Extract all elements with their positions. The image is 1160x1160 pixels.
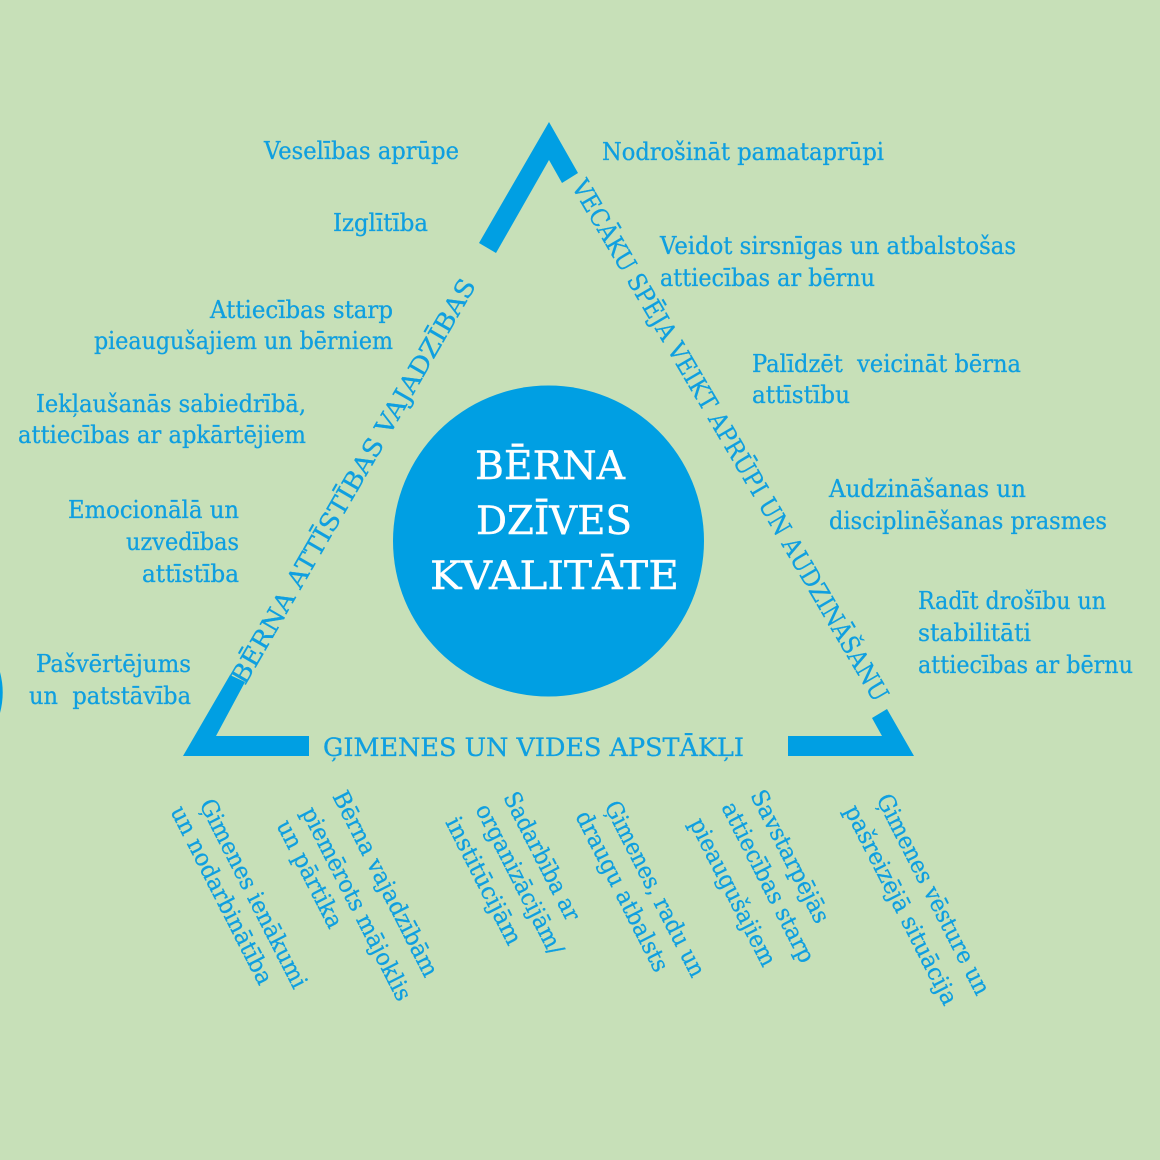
bottom item: family and friends support: Ģimenes, radu un [599, 796, 712, 982]
right list: parenting capacity: attīstību [752, 381, 850, 409]
bottom item: relations between adults: Savstarpējās [745, 785, 836, 928]
right list: parenting capacity: attiecības ar bērnu [918, 651, 1133, 679]
left list: child development needs [18, 137, 459, 710]
heading: bottom side of triangle: ĢIMENES UN VIDES APSTĀKĻI [323, 733, 744, 762]
right list: parenting capacity: attiecības ar bērnu [660, 264, 875, 292]
bottom item: housing and food: piemērots mājoklis [296, 802, 418, 1005]
bottom item: income and employment: un nodarbinātība [165, 801, 279, 989]
left list: child development needs: Pašvērtējums [36, 650, 191, 678]
bottom item: family history and current situation: pašreizējā situācija [839, 800, 964, 1010]
left list: child development needs: Attiecības starp [209, 296, 393, 324]
bottom item: housing and food [271, 786, 445, 1005]
triangle: top corner [479, 122, 578, 253]
bottom item: cooperation with organisations [440, 787, 587, 960]
right list: parenting capacity: Radīt drošību un [918, 587, 1106, 615]
triangle: bottom left corner [183, 675, 309, 756]
left list: child development needs: attīstība [142, 560, 239, 588]
right list: parenting capacity: Nodrošināt pamataprūpi [602, 138, 884, 166]
left list: child development needs: attiecības ar apkārtējiem [18, 421, 306, 449]
bottom item: relations between adults: attiecības starp [716, 797, 821, 967]
left list: child development needs: Veselības aprūpe [263, 137, 459, 165]
bottom item: family and friends support: draugu atbalsts [570, 806, 675, 976]
right list: parenting capacity: disciplinēšanas prasmes [829, 507, 1107, 535]
right list: parenting capacity: Palīdzēt veicināt bērna [752, 350, 1021, 378]
bottom item: cooperation with organisations: institūcijām [440, 812, 528, 949]
central circle: child's quality of life: KVALITĀTE [430, 554, 679, 599]
triangle: bottom right corner [788, 709, 914, 756]
bottom item: income and employment: Ģimenes ienākumi [194, 794, 313, 993]
right list: parenting capacity: Audzināšanas un [828, 475, 1026, 503]
central circle: child's quality of life: BĒRNA [475, 444, 626, 489]
heading: left side of triangle: BĒRNA ATTĪSTĪBAS VAJADZĪBAS [225, 274, 482, 689]
heading: right side of triangle: VECĀKU SPĒJA VEIKT APRŪPI UN AUDZINĀŠANU [565, 174, 894, 707]
bottom item: cooperation with organisations: Sadarbība ar [498, 787, 587, 926]
bottom item: housing and food: Bērna vajadzībām [327, 786, 445, 981]
left list: child development needs: Emocionālā un [68, 496, 239, 524]
bottom item: relations between adults [684, 785, 836, 971]
bottom item: housing and food: un pārtika [271, 815, 349, 933]
bottom item: cooperation with organisations: organizācijām/ [470, 799, 570, 960]
left list: child development needs: Izglītība [333, 209, 428, 237]
right list: parenting capacity [602, 138, 1133, 679]
left list: child development needs: Iekļaušanās sabiedrībā, [36, 390, 306, 418]
central circle: child's quality of life [393, 386, 704, 696]
left list: child development needs: un patstāvība [29, 682, 191, 710]
right list: parenting capacity: stabilitāti [918, 619, 1031, 647]
left list: child development needs: uzvedības [126, 528, 239, 556]
central circle: child's quality of life: DZĪVES [476, 499, 632, 544]
bottom item: relations between adults: pieaugušajiem [684, 813, 783, 971]
icon: partial circle at left edge [0, 672, 3, 713]
bottom item: family history and current situation: Ģimenes vēsture un [871, 789, 996, 1000]
left list: child development needs: pieaugušajiem un bērniem [94, 327, 393, 355]
right list: parenting capacity: Veidot sirsnīgas un atbalstošas [659, 232, 1016, 260]
